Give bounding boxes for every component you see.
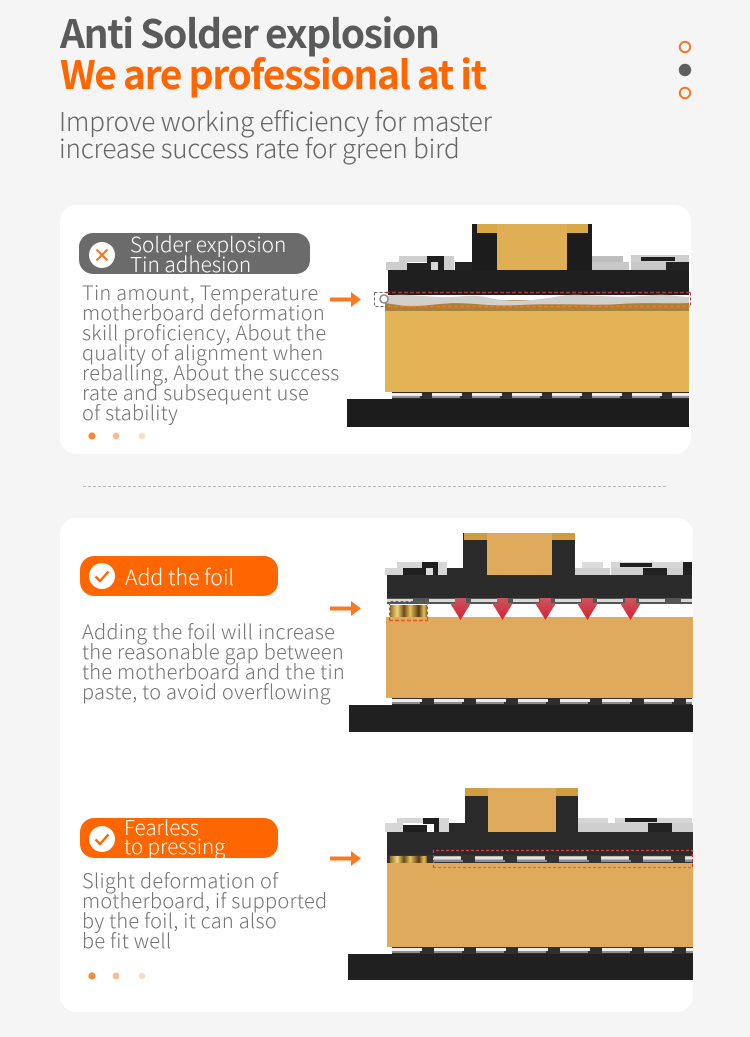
description text: Adding the foil will increase	[82, 616, 335, 644]
title	[60, 4, 486, 101]
diagram: foil added cross-section	[349, 533, 693, 732]
subtitle: Improve working efficiency for master	[59, 102, 492, 139]
icon: cross	[89, 242, 115, 268]
description text: be fit well	[82, 924, 172, 954]
description text: by the foil, it can also	[82, 904, 277, 934]
badge: solder explosion	[79, 233, 310, 274]
section: add the foil	[80, 556, 345, 704]
arrow: points to pressed area	[330, 851, 361, 866]
icon: check	[89, 563, 115, 589]
panel: solder explosion problem	[60, 205, 691, 454]
decorative page dots	[678, 40, 692, 100]
panel: foil solution	[60, 518, 693, 1012]
badge text: Fearless	[124, 811, 199, 841]
description text: skill proficiency, About the	[82, 316, 326, 346]
icon: check	[89, 826, 115, 852]
title line: We are professional at it: We are professional at it	[60, 45, 486, 101]
badge text: Solder explosion	[130, 228, 286, 258]
subtitle	[59, 102, 492, 166]
badge text: Add the foil	[125, 561, 234, 592]
icon: red pressure arrows	[450, 598, 641, 620]
title line: Anti Solder explosion: Anti Solder explosion	[60, 4, 439, 60]
carousel dots	[88, 972, 146, 980]
diagram: pressing cross-section	[348, 788, 694, 980]
description text: Tin amount, Temperature	[82, 276, 319, 306]
badge text	[130, 228, 286, 278]
description text	[82, 616, 345, 704]
description text: paste, to avoid overflowing	[82, 676, 331, 704]
arrow: points to foil	[330, 601, 361, 616]
section: fearless to pressing	[80, 811, 327, 980]
diagram: solder explosion cross-section	[347, 224, 691, 427]
carousel dots	[88, 432, 146, 440]
description text: the reasonable gap between	[82, 636, 344, 664]
badge text: Tin adhesion	[130, 248, 251, 278]
subtitle: increase success rate for green bird	[59, 129, 460, 166]
description text: rate and subsequent use	[82, 376, 309, 406]
description text: motherboard, if supported	[82, 884, 327, 914]
description text	[82, 864, 327, 954]
description text	[82, 276, 340, 426]
badge text	[124, 811, 225, 860]
description text: reballing, About the success	[82, 356, 340, 386]
divider	[83, 486, 666, 487]
description text: quality of alignment when	[82, 336, 324, 366]
arrow: points to tin overflow	[330, 292, 361, 307]
description text: the motherboard and the tin	[82, 656, 345, 684]
badge text: to pressing	[124, 830, 225, 860]
description text: of stability	[82, 396, 178, 426]
description text: motherboard deformation	[82, 296, 325, 326]
badge: fearless to pressing	[80, 818, 278, 858]
description text: Slight deformation of	[82, 864, 278, 894]
badge: add the foil	[80, 556, 278, 596]
